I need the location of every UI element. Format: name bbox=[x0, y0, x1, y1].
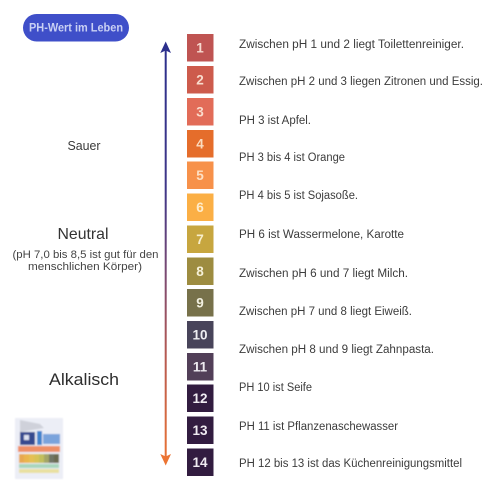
note: healthy pH range: menschlichen Körper) bbox=[28, 261, 142, 273]
pH 12 bbox=[187, 384, 214, 412]
note: healthy pH range: (pH 7,0 bis 8,5 ist gut für den bbox=[12, 249, 158, 261]
pH 6: 6 bbox=[196, 200, 204, 215]
pH 12: 12 bbox=[192, 391, 208, 406]
pH 9: 9 bbox=[196, 296, 204, 310]
text: pH 4-5: PH 4 bis 5 ist Sojasoße. bbox=[239, 190, 358, 202]
label: Neutral: Neutral bbox=[58, 226, 108, 243]
pH 13 bbox=[187, 416, 214, 444]
pH 9 bbox=[187, 289, 214, 316]
text: pH 12-13: PH 12 bis 13 ist das Küchenreinigungsmittel bbox=[239, 458, 462, 470]
text: pH 8-9: Zwischen pH 8 und 9 liegt Zahnpasta. bbox=[239, 344, 434, 356]
pH 10: 10 bbox=[192, 328, 208, 342]
pH 13: 13 bbox=[192, 423, 208, 438]
text: pH 11: PH 11 ist Pflanzenaschewasser bbox=[239, 421, 398, 433]
pH 1: 1 bbox=[196, 40, 204, 56]
text: pH 2-3: Zwischen pH 2 und 3 liegen Zitronen und Essig. bbox=[239, 76, 483, 88]
text: pH 6-7: Zwischen pH 6 und 7 liegt Milch. bbox=[239, 268, 408, 280]
pH 6 bbox=[187, 194, 214, 221]
pH 11: 11 bbox=[193, 360, 208, 374]
colour scale: pH 1 to 14 bbox=[187, 34, 214, 476]
icon: pH test strip package bbox=[15, 418, 63, 479]
pH 4: 4 bbox=[196, 136, 204, 152]
text: pH 10: PH 10 ist Seife bbox=[239, 382, 312, 394]
note: healthy pH range bbox=[12, 249, 158, 273]
text: pH 3: PH 3 ist Apfel. bbox=[239, 115, 311, 127]
descriptions of everyday substances bbox=[239, 39, 483, 470]
arrow: acid to alkaline scale bbox=[160, 42, 171, 466]
title: PH-Wert im Leben bbox=[29, 22, 123, 34]
pH 14: 14 bbox=[192, 455, 208, 470]
pH 1 bbox=[187, 34, 214, 62]
pH 3 bbox=[187, 98, 214, 126]
pH 14 bbox=[187, 448, 214, 476]
pH 2: 2 bbox=[196, 72, 204, 88]
pH 5: 5 bbox=[196, 168, 204, 183]
label: Alkalisch: Alkalisch bbox=[49, 370, 119, 389]
text: pH 6: PH 6 ist Wassermelone, Karotte bbox=[239, 229, 404, 241]
pH 8 bbox=[187, 258, 214, 285]
title bbox=[23, 14, 129, 42]
pH 11 bbox=[187, 353, 214, 380]
pH 10 bbox=[187, 321, 214, 348]
pH 5 bbox=[187, 162, 214, 189]
pH 4 bbox=[187, 130, 214, 158]
text: pH 1-2: Zwischen pH 1 und 2 liegt Toilettenreiniger. bbox=[239, 39, 464, 51]
text: pH 7-8: Zwischen pH 7 und 8 liegt Eiweiß. bbox=[239, 306, 412, 318]
pH 3: 3 bbox=[196, 104, 204, 120]
pH 8: 8 bbox=[196, 264, 204, 279]
text: pH 3-4: PH 3 bis 4 ist Orange bbox=[239, 152, 345, 164]
pH 7: 7 bbox=[196, 232, 204, 247]
label: Sauer: Sauer bbox=[68, 139, 100, 153]
pH 7 bbox=[187, 226, 214, 253]
pH 2 bbox=[187, 66, 214, 94]
